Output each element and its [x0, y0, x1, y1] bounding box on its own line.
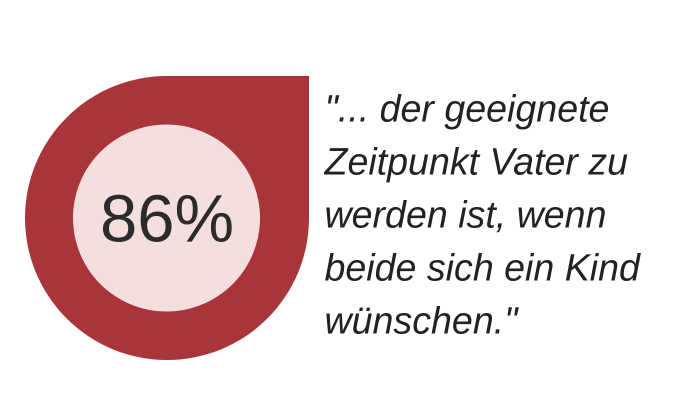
- percentage: 86%: [100, 182, 234, 256]
- quote: Zeitpunkt Vater zu: [324, 140, 628, 182]
- quote: [324, 88, 641, 342]
- quote: werden ist, wenn: [324, 194, 606, 236]
- quote: "... der geeignete: [324, 88, 609, 130]
- teardrop shape: [25, 76, 309, 360]
- quote: beide sich ein Kind: [324, 246, 641, 288]
- quote: wünschen.": [324, 300, 519, 342]
- inner circle: [73, 124, 260, 312]
